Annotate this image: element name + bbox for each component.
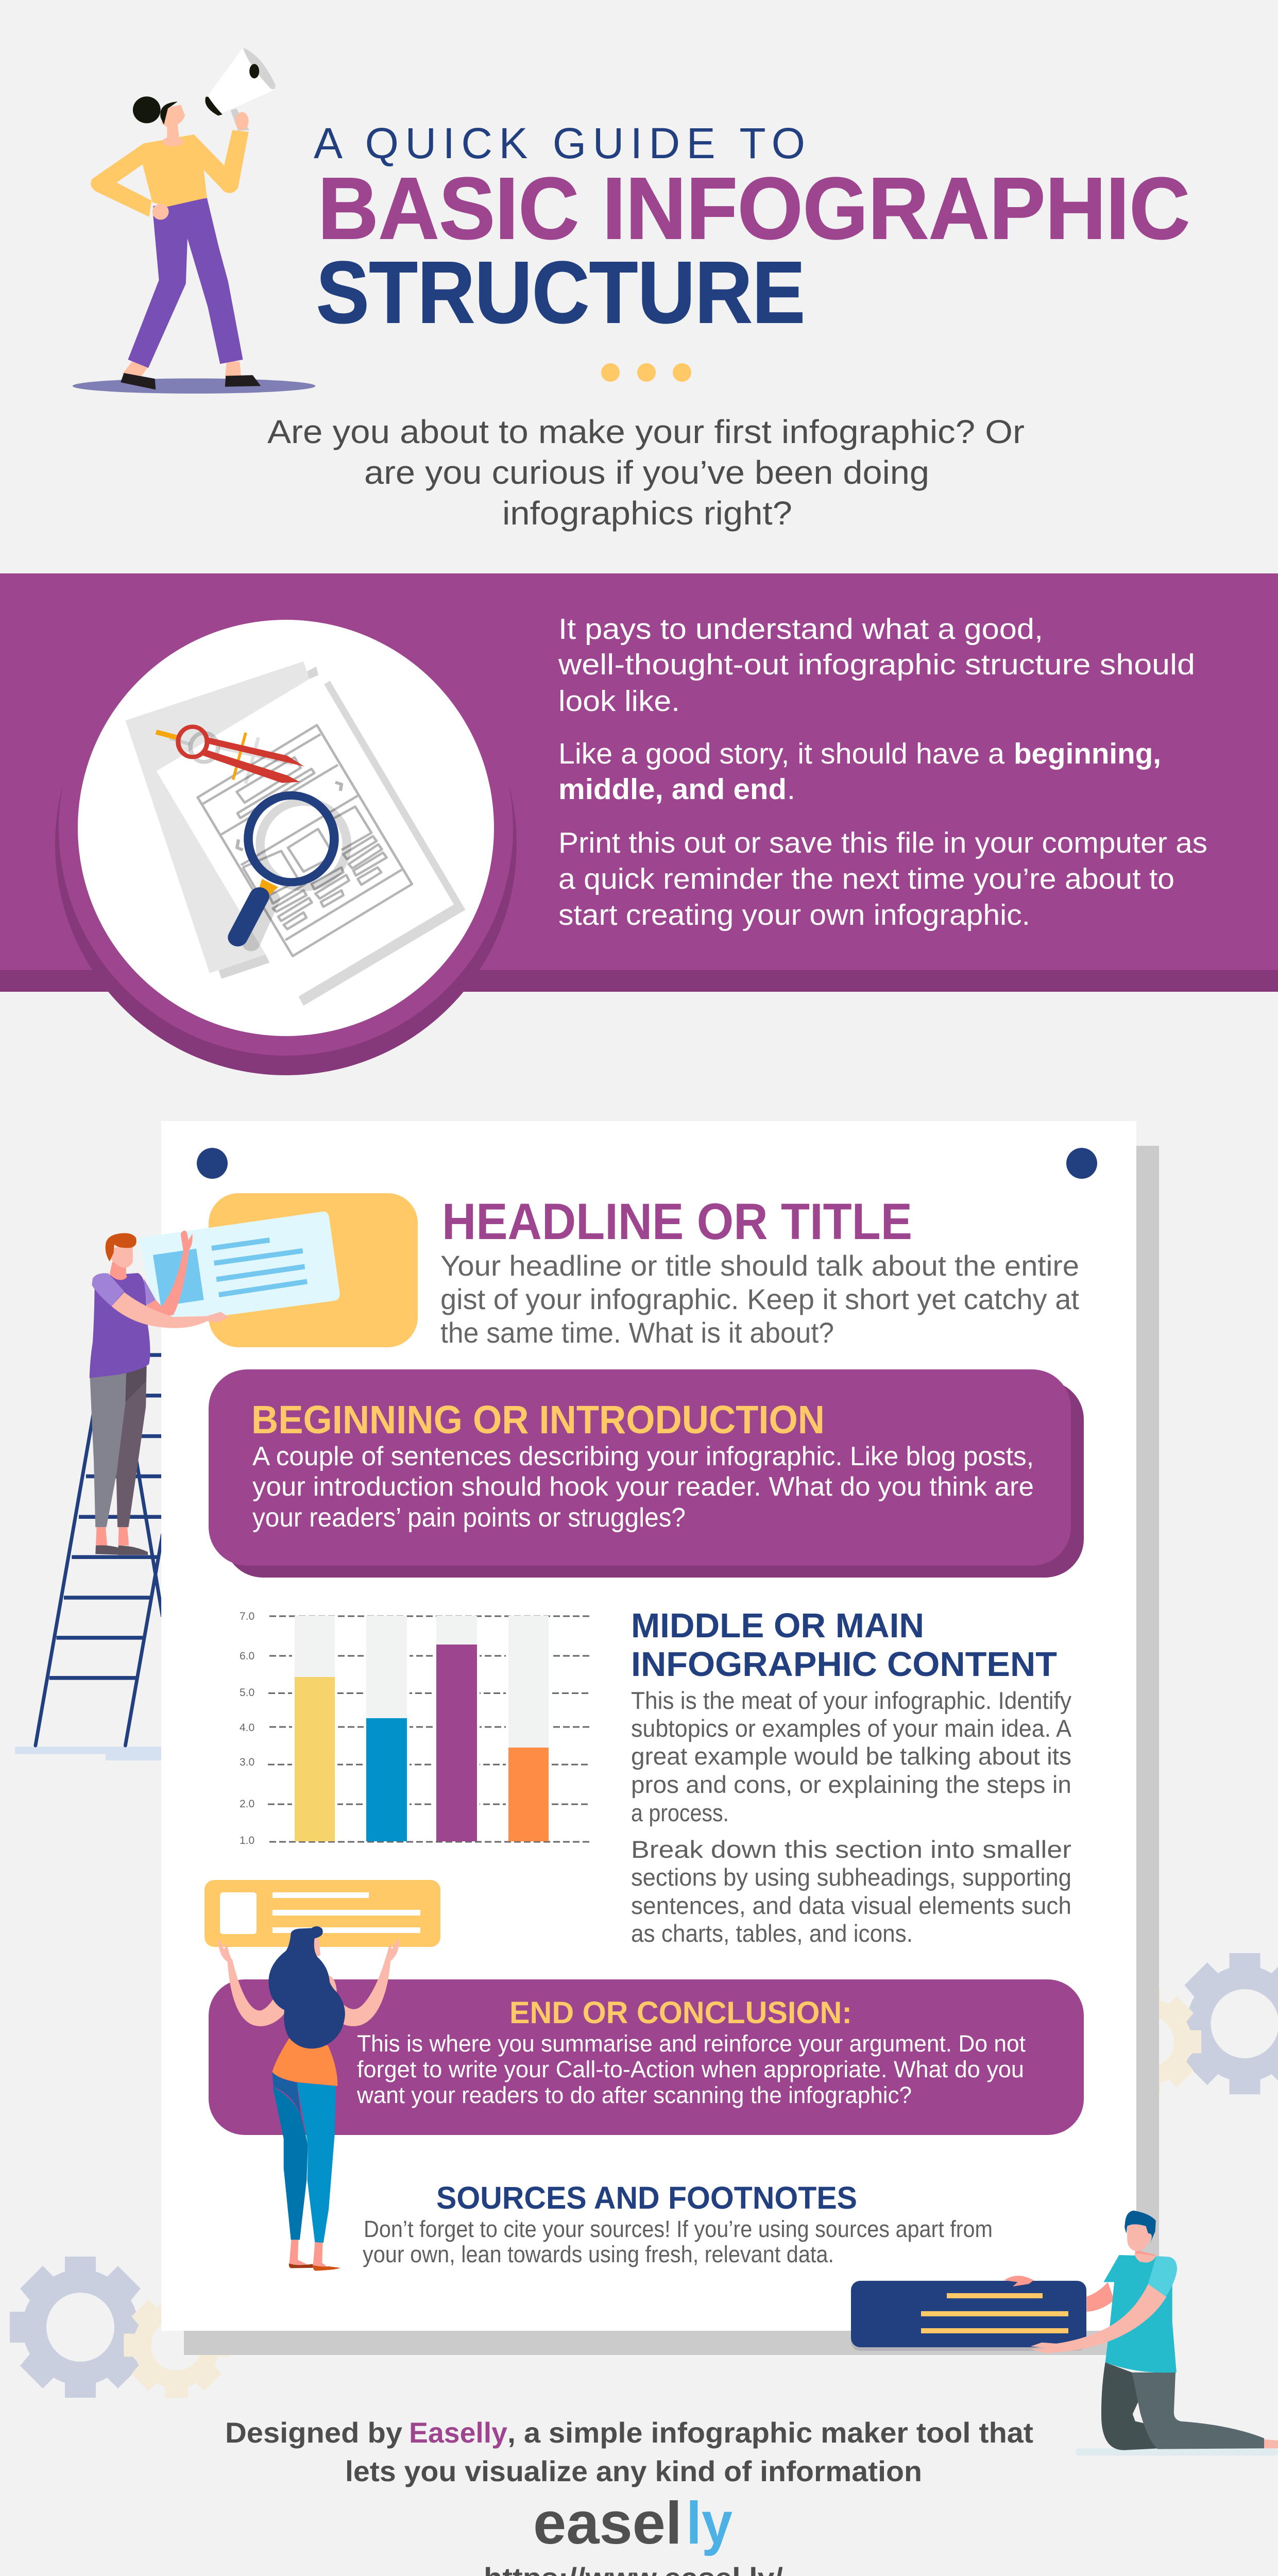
- text: middle description: This is the meat of your infographic. Identify: [631, 1687, 1071, 1714]
- heading: middle or main: INFOGRAPHIC CONTENT: [631, 1645, 1057, 1684]
- text: sources description: your own, lean towards using fresh, relevant data.: [363, 2241, 834, 2267]
- icon: man on ladder holding card: [90, 1211, 340, 1555]
- text: headline description: [440, 1249, 1079, 1349]
- bar chart: 3.0: [240, 1756, 254, 1768]
- text: middle description: subtopics or examples of your main idea. A: [631, 1715, 1072, 1742]
- bar chart: 5.0: [240, 1687, 254, 1699]
- title: [314, 119, 1190, 342]
- icon: megaphone woman: [73, 48, 315, 394]
- text: middle description: sections by using subheadings, supporting: [631, 1863, 1071, 1891]
- footer text: lets you visualize any kind of information: [345, 2455, 922, 2487]
- title line 1: A QUICK GUIDE TO: [314, 119, 805, 167]
- text: middle description: Break down this section into smaller: [631, 1836, 1071, 1863]
- headline block background: [209, 1193, 418, 1347]
- bar chart: 1.0: [240, 1835, 254, 1846]
- panel text: why structure matters: beginning,: [1014, 737, 1161, 770]
- panel: poster shadow: [184, 1146, 1159, 2355]
- heading: headline or title: HEADLINE OR TITLE: [442, 1193, 912, 1250]
- text: middle description: sentences, and data visual elements such: [631, 1892, 1071, 1919]
- panel text: why structure matters: middle, and end: [558, 773, 787, 806]
- panel text: why structure matters: [558, 613, 1207, 931]
- panel text: why structure matters: well-thought-out infographic structure should: [558, 648, 1195, 681]
- heading: beginning: BEGINNING OR INTRODUCTION: [251, 1398, 825, 1442]
- footer text: Designed by: [225, 2416, 402, 2449]
- icon: document with magnifier and compass: [125, 662, 466, 1006]
- card: navy held by man: [851, 2281, 1114, 2351]
- text: beginning description: your introduction should hook your reader. What do you think are: [252, 1472, 1034, 1502]
- text: sources description: Don’t forget to cite your sources! If you’re using sources apart from: [364, 2216, 993, 2242]
- text: end description: want your readers to do after scanning the infographic?: [356, 2082, 912, 2108]
- pin left: [197, 1148, 228, 1179]
- text: end description: forget to write your Call-to-Action when appropriate. What do you: [357, 2056, 1024, 2082]
- panel text: why structure matters: Like a good story, it should have a: [558, 737, 1004, 770]
- bar chart: 2.0: [240, 1798, 254, 1810]
- text: end description: This is where you summarise and reinforce your argument. Do not: [357, 2030, 1026, 2057]
- heading: middle or main: [631, 1606, 1057, 1684]
- text: middle description: pros and cons, or explaining the steps in: [631, 1771, 1071, 1798]
- bar chart: 7.0: [240, 1611, 254, 1622]
- panel: end or conclusion: [209, 1979, 1084, 2135]
- text: beginning description: A couple of sentences describing your infographic. Like blog posts,: [252, 1442, 1034, 1471]
- panel text: why structure matters: It pays to understand what a good,: [558, 613, 1043, 646]
- panel: beginning or introduction: [209, 1369, 1084, 1578]
- panel text: why structure matters: a quick reminder the next time you’re about to: [558, 862, 1174, 895]
- footer text: Easelly: [409, 2416, 507, 2449]
- panel text: why structure matters: start creating your own infographic.: [558, 899, 1030, 931]
- text: headline description: gist of your infographic. Keep it short yet catchy at: [440, 1283, 1079, 1315]
- intro text: [267, 413, 1025, 532]
- panel text: why structure matters: Print this out or save this file in your computer as: [558, 826, 1207, 859]
- title line 3: STRUCTURE: [316, 244, 805, 342]
- footer text: [225, 2416, 1033, 2487]
- text: middle description: [631, 1687, 1072, 1947]
- heading: sources: SOURCES AND FOOTNOTES: [436, 2180, 857, 2215]
- intro text: infographics right?: [502, 495, 792, 532]
- footer text: , a simple infographic maker tool that: [507, 2416, 1033, 2449]
- text: middle description: great example would be talking about its: [631, 1742, 1071, 1770]
- three dots: [601, 363, 691, 382]
- panel: poster: [161, 1121, 1136, 2331]
- icon: kneeling man: [1004, 2211, 1278, 2455]
- icon: woman holding card: [218, 1926, 399, 2271]
- text: middle description: a process.: [631, 1799, 729, 1826]
- panel: purple band: [0, 573, 1278, 1075]
- text: end description: [356, 2030, 1026, 2108]
- intro text: Are you about to make your first infographic? Or: [267, 413, 1025, 450]
- card: yellow held by woman: [205, 1880, 440, 1947]
- text: beginning description: [252, 1442, 1034, 1533]
- text: sources description: [363, 2216, 993, 2267]
- panel text: why structure matters: .: [787, 773, 795, 806]
- icon: left gears: [10, 2257, 229, 2398]
- text: headline description: Your headline or title should talk about the entire: [440, 1249, 1079, 1282]
- panel text: why structure matters: look like.: [558, 685, 680, 718]
- text: middle description: as charts, tables, and icons.: [631, 1920, 913, 1947]
- bar chart: 4.0: [240, 1722, 254, 1734]
- title line 2: BASIC INFOGRAPHIC: [318, 160, 1190, 258]
- pin right: [1066, 1148, 1097, 1179]
- text: headline description: the same time. What is it about?: [440, 1316, 834, 1349]
- icon: right gears: [1096, 1953, 1278, 2094]
- heading: middle or main: MIDDLE OR MAIN: [631, 1606, 924, 1645]
- bar chart: [240, 1611, 590, 1846]
- bar chart: 6.0: [240, 1650, 254, 1662]
- logo: easelly: easel: [533, 2489, 682, 2556]
- intro text: are you curious if you’ve been doing: [364, 454, 929, 491]
- icon: ladder: [15, 1355, 162, 1760]
- text: beginning description: your readers’ pain points or struggles?: [252, 1503, 686, 1533]
- heading: end: END OR CONCLUSION:: [509, 1995, 852, 2030]
- logo: easelly: ly: [686, 2489, 732, 2556]
